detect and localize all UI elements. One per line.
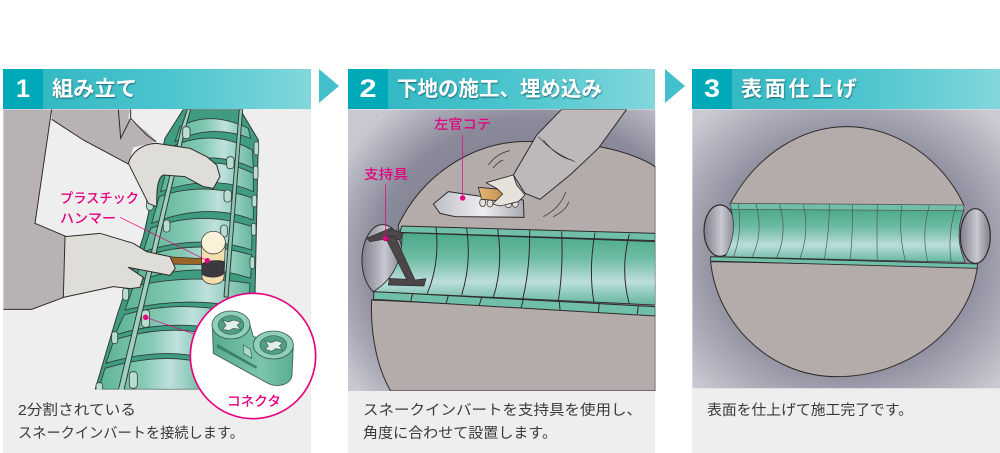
- callout: support leader: [383, 184, 388, 241]
- worker sleeves: [3, 109, 157, 309]
- header: step 1: 1: [16, 75, 30, 103]
- support bracket: [367, 228, 426, 286]
- panel background 2: [348, 109, 655, 453]
- header: step 1: 組み立て: [52, 78, 137, 101]
- header: step 1: [3, 69, 311, 109]
- concrete upper: [398, 141, 655, 237]
- label: support: 支持具: [364, 167, 408, 182]
- snake invert pipe: [95, 109, 259, 393]
- text: step 2 description: スネークインバートを支持具を使用し、: [363, 402, 642, 419]
- header: step 3: 表面仕上げ: [741, 78, 857, 101]
- panel background 3: [692, 109, 1000, 453]
- illustration: burying pipe: [348, 109, 655, 391]
- panel: step 1 assembly: [3, 69, 316, 453]
- header: step 3: [692, 69, 1000, 109]
- upper glove: [128, 143, 220, 207]
- label: plaster trowel: 左官コテ: [434, 116, 491, 132]
- hand and trowel: [433, 109, 627, 217]
- illustration: finished pipe: [692, 109, 1000, 388]
- text: step 1 description: スネークインバートを接続します。: [18, 425, 244, 442]
- label: plastic hammer: ハンマー: [60, 211, 116, 226]
- concrete lower: [371, 300, 655, 391]
- concrete lower: [711, 262, 977, 377]
- callout: connector leader: [143, 315, 197, 335]
- arrow: step 2 to 3: [665, 69, 685, 103]
- header: step 2: 下地の施工、埋め込み: [397, 78, 602, 101]
- lower glove: [63, 233, 175, 297]
- callout: hammer leader: [120, 217, 210, 263]
- wall background: [692, 109, 1000, 388]
- label: plastic hammer: [60, 191, 139, 226]
- arrow: step 1 to 2: [319, 69, 339, 103]
- callout: trowel leader: [460, 135, 465, 201]
- icon: connector: [212, 311, 293, 385]
- wall background: [348, 109, 655, 391]
- panel: step 3 finishing: [692, 69, 1000, 453]
- text: step 2 description: 角度に合わせて設置します。: [363, 425, 557, 442]
- pipe channel: [711, 203, 977, 268]
- label: connector: コネクタ: [227, 394, 281, 409]
- text: step 1 description: 2分割されている: [18, 402, 136, 419]
- hammer: [167, 231, 225, 284]
- pipe opening: [362, 225, 403, 295]
- label: plastic hammer: プラスチック: [60, 191, 139, 206]
- header: step 2: 2: [360, 75, 376, 103]
- concrete upper: [730, 127, 964, 205]
- text: step 2 description: [363, 402, 642, 442]
- text: step 1 description: [18, 402, 244, 442]
- header: step 3: 3: [704, 75, 720, 103]
- illustration: assembling pipe: [3, 109, 316, 419]
- connector circle inset: [190, 293, 316, 419]
- pipe channel: [373, 226, 655, 316]
- header: step 2: [348, 69, 655, 109]
- holes: [704, 205, 736, 256]
- text: step 3 description: 表面を仕上げて施工完了です。: [707, 402, 913, 419]
- panel: step 2 base and burying: [348, 69, 655, 453]
- panel background 1: [3, 109, 311, 453]
